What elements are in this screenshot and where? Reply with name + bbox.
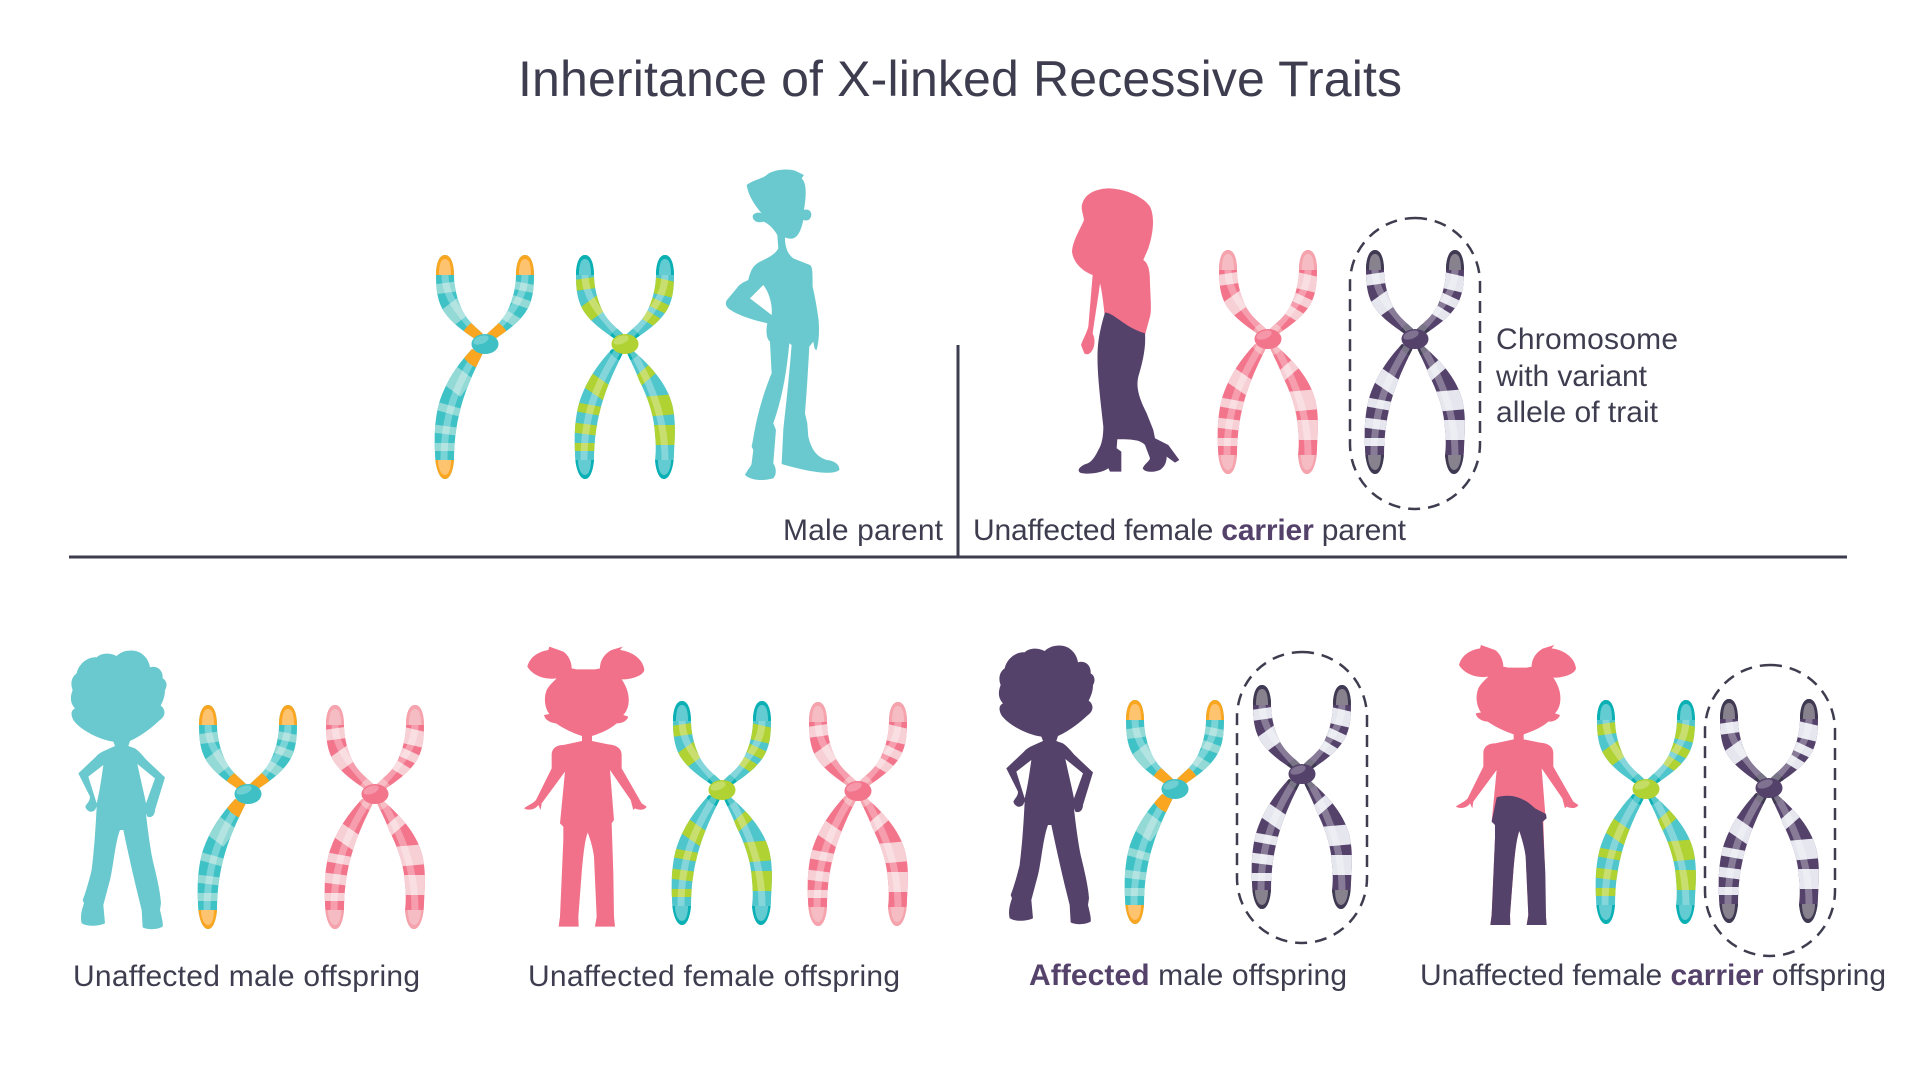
chromosome: X bbox=[315, 699, 435, 934]
label: female carrier parent: Unaffected female carrier parent bbox=[973, 514, 1407, 547]
chromosome: paternal X bbox=[662, 695, 782, 930]
chromosome: Y bbox=[1115, 694, 1235, 929]
label: Unaffected male offspring bbox=[73, 960, 420, 993]
callout: dashed ring around variant chromosome bbox=[1350, 218, 1480, 509]
chromosome: female parent X bbox=[1208, 244, 1328, 479]
label: Affected male offspring bbox=[1029, 959, 1347, 992]
chromosome: paternal X bbox=[1586, 694, 1706, 929]
title: Inheritance of X-linked Recessive Traits bbox=[518, 51, 1402, 107]
legend text: chromosome with variant allele of trait: Chromosome bbox=[1496, 323, 1678, 356]
chromosome: variant X bbox=[1242, 679, 1362, 914]
panel: unaffected female offspring bbox=[524, 647, 918, 993]
chromosome: Y bbox=[188, 699, 308, 934]
label: Unaffected female offspring bbox=[528, 960, 900, 993]
callout: dashed ring bbox=[1705, 665, 1835, 956]
chromosome: male parent Y bbox=[425, 249, 545, 484]
label: male parent: Male parent bbox=[783, 514, 944, 547]
icon: boy silhouette bbox=[71, 650, 167, 929]
icon: male parent silhouette bbox=[726, 169, 839, 480]
legend text: chromosome with variant allele of trait: with variant bbox=[1495, 360, 1648, 393]
icon: girl silhouette bbox=[524, 647, 647, 927]
chromosome: variant X bbox=[1709, 693, 1829, 928]
chromosome: female parent variant X bbox=[1355, 244, 1475, 479]
panel: parents bbox=[425, 169, 1678, 547]
icon: female parent silhouette bbox=[1072, 188, 1179, 474]
panel: unaffected male offspring bbox=[71, 650, 435, 993]
legend text: chromosome with variant allele of trait: allele of trait bbox=[1496, 396, 1659, 429]
label: Unaffected female carrier offspring bbox=[1420, 959, 1886, 992]
callout: dashed ring bbox=[1237, 652, 1367, 943]
panel: unaffected female carrier offspring bbox=[1420, 645, 1886, 992]
icon: affected boy silhouette bbox=[999, 645, 1095, 924]
panel: affected male offspring bbox=[999, 645, 1367, 992]
icon: carrier girl silhouette bbox=[1456, 645, 1578, 925]
legend text: chromosome with variant allele of trait bbox=[1495, 323, 1678, 429]
chromosome: maternal X bbox=[798, 696, 918, 931]
chromosome: male parent X bbox=[565, 249, 685, 484]
divider: vertical and horizontal rules bbox=[69, 345, 1847, 557]
